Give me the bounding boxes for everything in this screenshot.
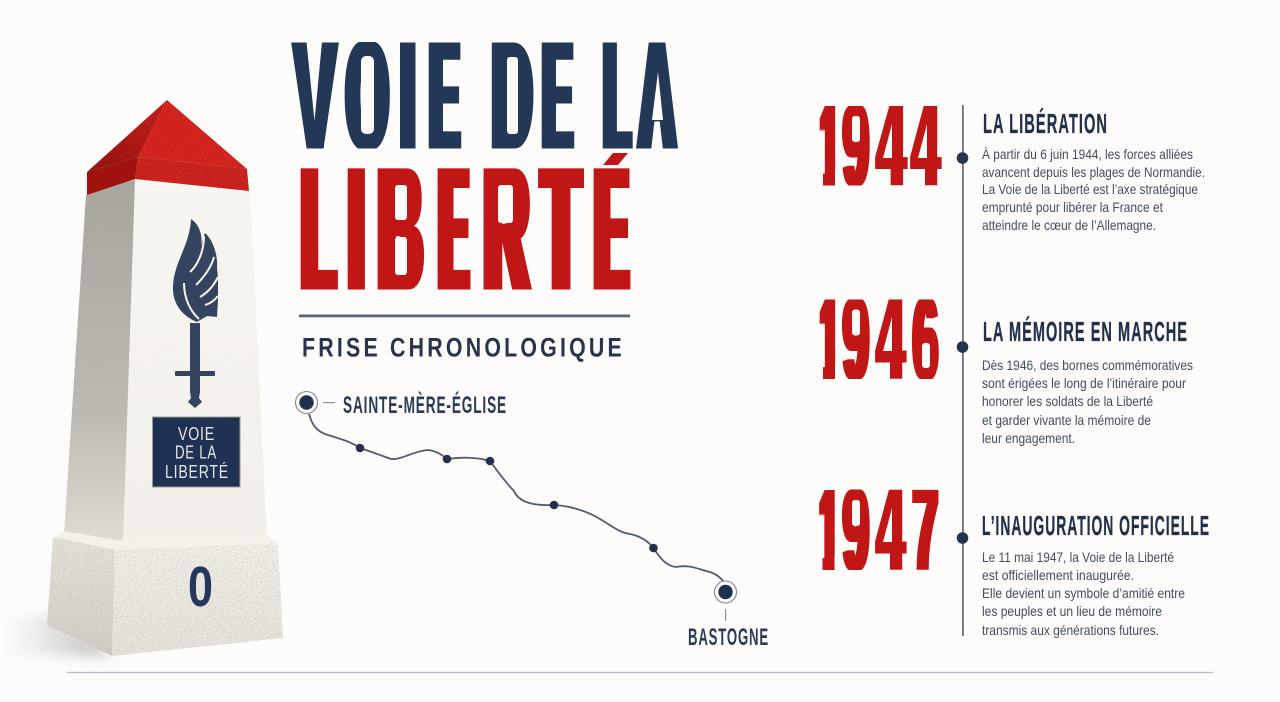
cap front side	[135, 157, 249, 191]
title line one: L	[604, 10, 630, 182]
body text	[982, 358, 1193, 446]
year 1947: 4	[877, 465, 904, 595]
year 1947: 9	[843, 465, 868, 595]
timeline axis	[962, 105, 964, 636]
title line one: I	[400, 10, 415, 182]
year 1944	[820, 106, 942, 186]
year 1944: 4	[877, 80, 905, 210]
subtitle: FRISE CHRONOLOGIQUE	[302, 332, 625, 362]
milestone base, front face	[112, 543, 283, 656]
text: A	[639, 10, 675, 182]
title line two: I	[349, 132, 363, 328]
title line two: T	[542, 132, 580, 328]
timeline entry 1947	[819, 490, 1209, 638]
body text: Le 11 mai 1947, la Voie de la Liberté	[982, 550, 1174, 565]
milestone base, left face	[47, 537, 115, 656]
end label: BASTOGNE	[688, 624, 769, 651]
title line two: R	[484, 132, 528, 328]
title line one: O	[346, 10, 388, 182]
plaque: VOIE	[178, 424, 215, 444]
body text: À partir du 6 juin 1944, les forces alliées	[982, 147, 1193, 162]
timeline entry 1946: 6	[913, 274, 937, 404]
body text: emprunté pour libérer la France et	[982, 200, 1163, 215]
body text: transmis aux générations futures.	[982, 623, 1159, 638]
year 1946	[820, 300, 939, 379]
flame feather gaps	[184, 236, 218, 319]
year 1946: 4	[877, 274, 904, 404]
title rule	[299, 314, 630, 317]
plaque: DE LA	[175, 442, 217, 462]
body text	[982, 147, 1205, 233]
timeline entry 1944	[820, 106, 1204, 233]
route line	[309, 414, 723, 581]
ground shadow	[0, 614, 112, 656]
red cap	[87, 100, 249, 195]
milestone shaft, front face	[123, 179, 267, 544]
cap right slope	[138, 100, 247, 169]
route map	[296, 391, 769, 651]
timeline entry 1947: 7	[913, 465, 937, 595]
body text: sont érigées le long de l’itinéraire pour	[982, 376, 1186, 391]
body text: leur engagement.	[982, 431, 1075, 446]
body text: Dès 1946, des bornes commémoratives	[982, 358, 1193, 373]
year 1947: 1	[820, 465, 838, 595]
engraved kilometre zero: 0	[188, 555, 213, 619]
milestone shaft, shaded side	[64, 179, 136, 542]
cap left slope	[87, 100, 167, 172]
title line one: D	[492, 10, 532, 182]
title line one: E	[430, 10, 459, 182]
stop marker 2	[443, 455, 451, 463]
axis dot 1944	[957, 152, 968, 164]
heading: LA LIBÉRATION	[983, 108, 1108, 139]
axis dot 1946	[957, 341, 968, 353]
title line two: E	[440, 132, 467, 328]
flame	[173, 219, 218, 322]
title: É	[595, 132, 627, 328]
start marker	[296, 392, 318, 414]
year 1946: 9	[843, 274, 868, 404]
cap left side	[87, 157, 138, 195]
body text: Elle devient un symbole d’amitié entre	[982, 586, 1185, 601]
body text: avancent depuis les plages de Normandie.	[982, 165, 1205, 180]
start label: SAINTE-MÈRE-ÉGLISE	[343, 391, 507, 419]
stop marker 4	[550, 501, 558, 509]
stone texture on shaft	[64, 190, 267, 538]
stone texture on base	[47, 537, 283, 656]
illustration: stone milestone	[47, 100, 283, 656]
timeline entry 1946	[820, 300, 1192, 446]
body text: La Voie de la Liberté est l’axe stratégique	[982, 182, 1198, 197]
title line one: E	[543, 10, 572, 182]
torch stem and blade	[188, 323, 202, 408]
plaque	[152, 417, 240, 487]
end marker	[714, 581, 736, 603]
axis dot 1947	[957, 532, 968, 544]
cap texture	[87, 100, 249, 195]
torch guard	[175, 371, 215, 376]
year 1946: 1	[820, 274, 838, 404]
end connector	[725, 609, 726, 621]
stop marker 3	[486, 457, 494, 465]
title	[291, 42, 678, 290]
timeline entry 1944: 4	[912, 80, 939, 210]
milestone base, top bevel	[53, 531, 278, 551]
body text: atteindre le cœur de l’Allemagne.	[982, 218, 1156, 233]
year 1944: 1	[820, 80, 838, 210]
title line two: B	[379, 132, 422, 328]
title line one	[291, 42, 678, 148]
plaque: LIBERTÉ	[165, 462, 229, 482]
body text	[982, 550, 1185, 638]
stop marker 1	[356, 444, 364, 452]
torch emblem	[173, 219, 218, 408]
body text: honorer les soldats de la Liberté	[982, 394, 1153, 409]
body text: est officiellement inaugurée.	[982, 568, 1134, 583]
title line two	[300, 153, 630, 290]
body text: et garder vivante la mémoire de	[982, 413, 1151, 428]
year 1944: 9	[843, 80, 868, 210]
body text: les peuples et un lieu de mémoire	[982, 604, 1162, 619]
start connector	[323, 402, 335, 403]
title line one: V	[295, 10, 335, 182]
stop marker 5	[649, 544, 658, 552]
year 1947	[819, 490, 938, 570]
footer rule	[67, 672, 1213, 673]
title line two: L	[302, 132, 335, 328]
